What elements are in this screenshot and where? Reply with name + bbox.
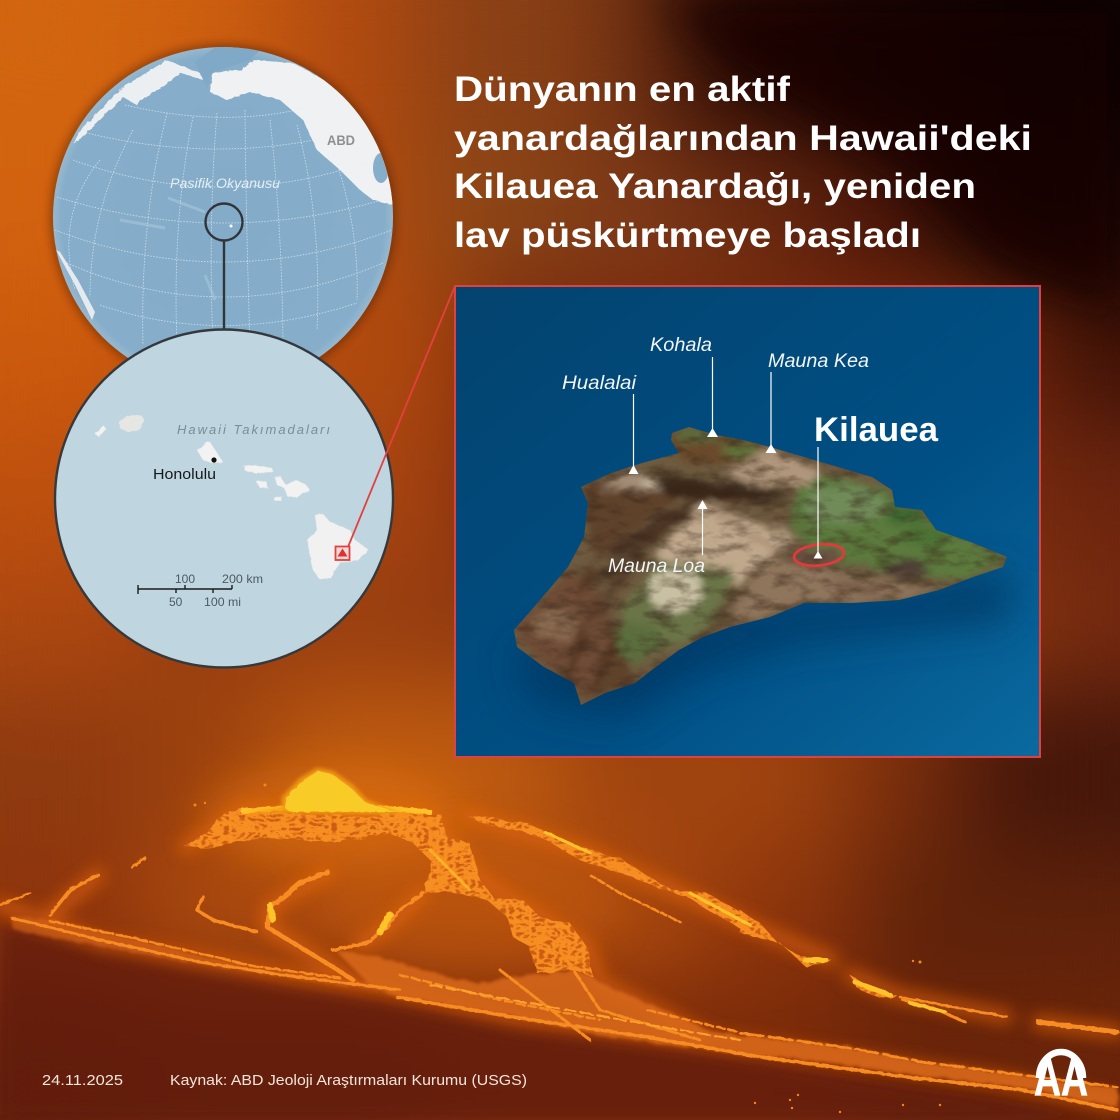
land: Australia edge — [56, 250, 95, 320]
label: Honolulu: Honolulu — [153, 466, 216, 483]
land: North America — [210, 60, 393, 205]
Kilauea coast — [730, 560, 940, 625]
Honolulu marker — [211, 457, 217, 463]
Mauna Kea cone — [725, 448, 818, 487]
water: Arctic coast — [262, 48, 395, 125]
label: Kilauea: Kilauea — [814, 411, 939, 449]
Mauna Loa dome — [655, 502, 795, 590]
scale bar: 50 — [169, 595, 183, 609]
south slopes — [620, 560, 735, 660]
lava sparks — [194, 784, 941, 1113]
logo: Anadolu Ajansı: AA — [1034, 1049, 1088, 1107]
saddle lava — [660, 475, 790, 500]
label: Hualalai: Hualalai — [562, 373, 637, 394]
water: Bering Sea — [204, 47, 260, 76]
title: lav püskürtmeye başladı — [454, 216, 921, 255]
lava streams — [0, 858, 1117, 1110]
Kohala ridge — [672, 433, 770, 465]
title — [454, 70, 1032, 255]
inset map: Hawaii islands — [55, 330, 393, 668]
water: Gulf of Mexico — [373, 153, 389, 183]
panel: 3D island map — [455, 286, 1040, 757]
Hualalai cone — [600, 470, 660, 490]
graticule — [55, 105, 392, 345]
leader: Kohala — [707, 357, 718, 437]
label: ABD: ABD — [327, 132, 355, 148]
land: Russia — [73, 60, 203, 143]
title: yanardağlarından Hawaii'deki — [454, 119, 1032, 158]
scale bar: 200 km — [222, 572, 263, 586]
western flank — [520, 470, 680, 700]
title: Kilauea Yanardağı, yeniden — [454, 167, 976, 206]
locator ring and connector — [206, 204, 242, 332]
leader: Kilauea — [814, 447, 822, 558]
leader: Mauna Loa — [698, 500, 708, 555]
scale bar: 100 mi — [204, 595, 241, 609]
footer: source: Kaynak: ABD Jeoloji Araştırmaları Kurumu (USGS) — [170, 1073, 527, 1089]
lava bands: translucent lower fields — [10, 915, 1118, 1108]
scale bar — [138, 572, 263, 609]
lava highlights — [243, 808, 945, 1012]
lava streaks — [565, 488, 880, 690]
panel border — [455, 286, 1040, 757]
label: Pasifik Okyanusu: Pasifik Okyanusu — [170, 176, 281, 191]
faint island chain — [120, 198, 215, 300]
label: Mauna Loa: Mauna Loa — [608, 556, 705, 577]
lava glow — [0, 810, 1118, 1105]
leader: Mauna Kea — [766, 372, 776, 453]
footer: date: 24.11.2025 — [42, 1073, 123, 1089]
islands — [95, 415, 369, 580]
erupting summit cone — [243, 768, 432, 815]
label: Hawaii Takımadaları: Hawaii Takımadaları — [177, 422, 330, 437]
lava bands: bright upper channels — [185, 808, 897, 998]
island terrain — [505, 420, 1015, 715]
green eastern slopes — [790, 470, 1010, 580]
callout: red leader line and marker — [336, 286, 455, 560]
Kilauea highlight ellipse — [793, 542, 845, 568]
island shadow — [515, 570, 1010, 720]
label: Kohala: Kohala — [650, 335, 712, 356]
title: Dünyanın en aktif — [454, 70, 790, 109]
label: Mauna Kea: Mauna Kea — [768, 351, 869, 372]
scale bar: 100 — [175, 572, 195, 586]
leader: Hualalai — [628, 394, 638, 474]
globe locator — [49, 40, 397, 391]
lava flows — [0, 784, 1118, 1113]
